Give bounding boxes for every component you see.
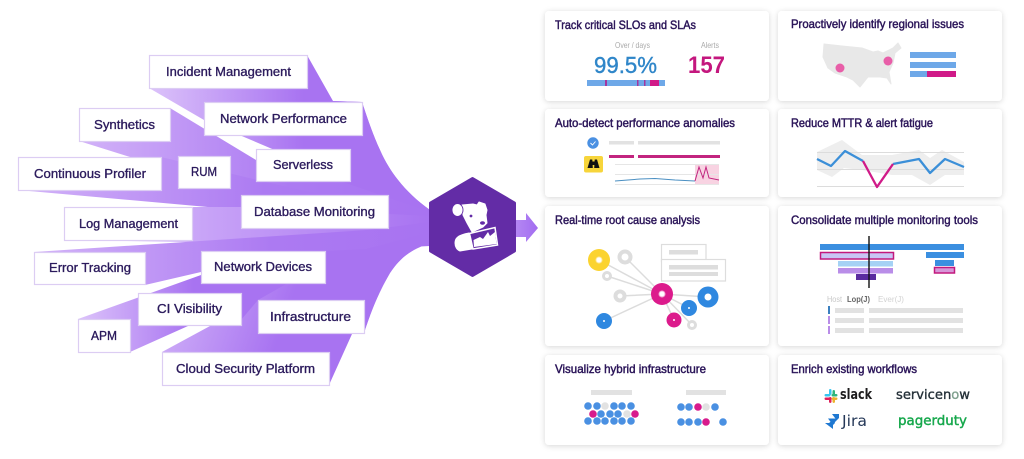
- log cards: [662, 244, 726, 281]
- label: Error Tracking: Error Tracking: [49, 260, 131, 275]
- flow: log management: [64, 207, 430, 242]
- flow: continuous profiler: [18, 157, 430, 230]
- label: Incident Management: Incident Management: [166, 64, 291, 79]
- status bar: [587, 80, 665, 86]
- label: Error Tracking: [34, 252, 146, 284]
- panel: Reduce MTTR & alert fatigue: [778, 109, 1002, 197]
- logo: slack: slack: [840, 387, 873, 403]
- heading: Proactively identify regional issues: [791, 17, 964, 31]
- panel: Proactively identify regional issues: [778, 11, 1002, 101]
- heading: Consolidate multiple monitoring tools: [791, 213, 978, 227]
- label: Cloud Security Platform: Cloud Security Platform: [176, 361, 315, 376]
- panel: Track critical SLOs and SLAs: [545, 11, 769, 101]
- US map with markers: [823, 43, 901, 87]
- label: Serverless: Serverless: [273, 157, 333, 172]
- label: APM: [78, 320, 130, 352]
- metric: 99.5%: 99.5%: [594, 52, 657, 78]
- table headers: Lop(J): [847, 294, 870, 304]
- panel: Visualize hybrid infrastructure: [545, 355, 769, 445]
- label: APM: APM: [91, 328, 117, 343]
- label: CI Visibility: CI Visibility: [157, 301, 222, 316]
- heading: Auto-detect performance anomalies: [555, 116, 735, 130]
- label: Synthetics: Synthetics: [94, 117, 155, 132]
- label: Cloud Security Platform: [162, 352, 330, 386]
- heading: Enrich existing workflows: [791, 362, 917, 376]
- label: Log Management: Log Management: [79, 216, 178, 231]
- label: Serverless: [256, 150, 350, 182]
- logo: slack: [824, 387, 873, 403]
- host map left: [584, 390, 639, 425]
- label: CI Visibility: [138, 294, 242, 326]
- label: Infrastructure: [258, 300, 364, 334]
- icon: check: [587, 137, 599, 149]
- heading: Track critical SLOs and SLAs: [555, 18, 696, 32]
- panel: Consolidate multiple monitoring tools: [778, 206, 1002, 346]
- label: RUM: [178, 156, 230, 188]
- panel: Auto-detect performance anomalies: [545, 109, 769, 197]
- label: Network Devices: Network Devices: [214, 259, 312, 274]
- label: Incident Management: [150, 56, 308, 88]
- label: Database Monitoring: [242, 196, 388, 228]
- logo: servicenow: servicenow: [896, 387, 970, 403]
- flow: cloud security, infrastructure, network devices: [162, 232, 430, 385]
- table headers: [827, 294, 904, 304]
- heading: Visualize hybrid infrastructure: [555, 362, 706, 376]
- flow: error tracking: [34, 222, 430, 285]
- metric: 157: 157: [688, 52, 725, 79]
- label: RUM: RUM: [191, 164, 217, 179]
- label: Continuous Profiler: [18, 158, 162, 190]
- icon: hexagon hub with dog logo: [430, 178, 514, 276]
- label: Network Devices: [202, 252, 326, 284]
- flow: APM and CI visibility: [78, 275, 288, 352]
- caption: alerts: Alerts: [701, 40, 719, 50]
- logo: Jira: [825, 412, 867, 430]
- line chart with anomaly: [615, 164, 719, 185]
- anomaly line chart: [817, 140, 964, 187]
- logo: Jira: Jira: [841, 412, 867, 430]
- table headers: Ever(J): [878, 294, 904, 304]
- label: Infrastructure: Infrastructure: [270, 309, 351, 324]
- flame graph: [820, 236, 964, 288]
- table headers: Host: [827, 294, 843, 304]
- network graph: [588, 249, 718, 329]
- label: Network Performance: Network Performance: [220, 111, 347, 126]
- flow ribbons converging on the hub: [18, 55, 430, 385]
- flow: merged trunk behind the labels: [241, 101, 430, 333]
- flow: synthetics and serverless: [79, 108, 430, 232]
- panel: Enrich existing workflows: [778, 355, 1002, 445]
- icon: binoculars: [584, 156, 603, 172]
- caption: over days: Over / days: [615, 40, 650, 50]
- label: Network Performance: [204, 102, 362, 136]
- label: Database Monitoring: Database Monitoring: [254, 204, 375, 219]
- heading: Real-time root cause analysis: [555, 213, 700, 227]
- arrow: output from hub: [512, 213, 538, 242]
- logo: pagerduty: pagerduty: [898, 413, 967, 429]
- label: Synthetics: [80, 108, 170, 142]
- region bars: [910, 52, 956, 77]
- flow: incident management and network performance: [149, 55, 430, 232]
- status rows: [609, 141, 720, 158]
- host map right: [677, 390, 727, 426]
- table rows: [828, 306, 963, 334]
- panel: Real-time root cause analysis: [545, 206, 769, 346]
- label: Log Management: [64, 208, 192, 240]
- label: Continuous Profiler: Continuous Profiler: [34, 166, 147, 181]
- heading: Reduce MTTR & alert fatigue: [791, 116, 933, 130]
